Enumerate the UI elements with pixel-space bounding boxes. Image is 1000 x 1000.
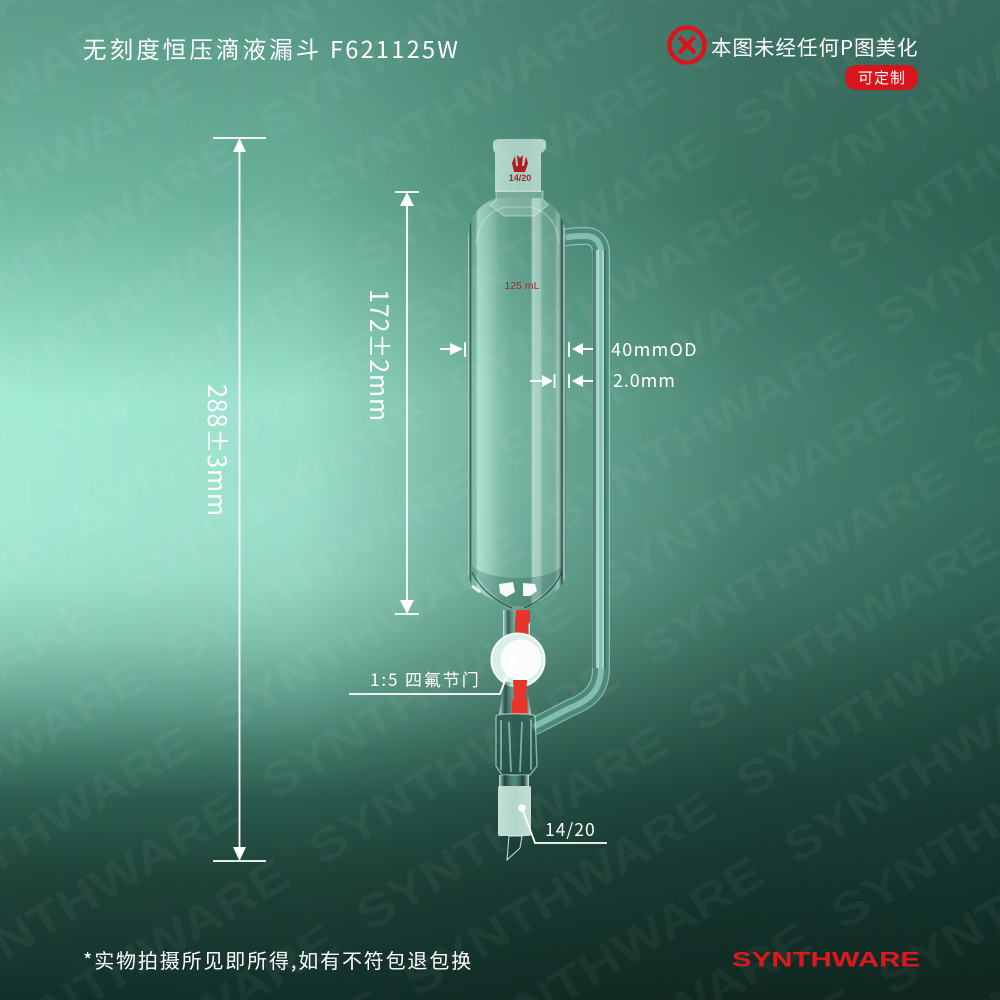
frosted top joint xyxy=(493,139,546,192)
title: 无刻度恒压滴液漏斗 F621125W xyxy=(83,31,460,65)
callout: 14/20 joint xyxy=(518,804,607,843)
dimension: overall height 288±3mm: 288±3mm xyxy=(200,384,236,517)
callout: 14/20 joint: 14/20 xyxy=(545,817,596,842)
label: 40mmOD: 40mmOD xyxy=(611,336,698,362)
lower red stopcock handle xyxy=(512,680,527,714)
badge: customizable xyxy=(845,65,918,90)
dimension: body height 172±2mm: 172±2mm xyxy=(362,289,398,422)
upper red stopcock handle xyxy=(515,610,530,646)
dimension: body height 172±2mm xyxy=(362,192,419,614)
icon: brand tulip mark xyxy=(512,155,528,172)
frosted top joint: 14/20 xyxy=(509,173,531,183)
funnel glassware xyxy=(468,139,605,860)
callout: 1:5 PTFE stopcock: 1:5 四氟节门 xyxy=(370,666,481,691)
dimension arrows: wall thickness xyxy=(530,374,593,388)
footnote: *实物拍摄所见即所得,如有不符包退包换 xyxy=(83,945,473,974)
badge: customizable: 可定制 xyxy=(858,67,906,88)
main cylinder body xyxy=(468,198,566,612)
lower outlet sleeve xyxy=(496,714,537,786)
volume mark: 125 mL xyxy=(504,280,540,292)
icon: no retouching cross xyxy=(670,28,704,62)
lower stem below stopcock xyxy=(499,682,531,714)
pressure equalising side arm xyxy=(533,236,605,727)
logo: SYNTHWARE: SYNTHWARE xyxy=(732,948,920,972)
label: 2.0mm: 2.0mm xyxy=(613,367,676,393)
lower stem xyxy=(503,610,530,638)
frosted lower joint xyxy=(498,786,531,836)
drip tip xyxy=(507,836,522,860)
dimension arrows: outer diameter xyxy=(440,342,593,357)
notice: not retouched: 本图未经任何P图美化 xyxy=(711,31,918,61)
dimension: overall height 288±3mm xyxy=(200,138,266,861)
PTFE stopcock disc xyxy=(492,634,544,686)
callout: 1:5 PTFE stopcock xyxy=(349,656,517,694)
inner neck and shoulder xyxy=(490,191,548,216)
